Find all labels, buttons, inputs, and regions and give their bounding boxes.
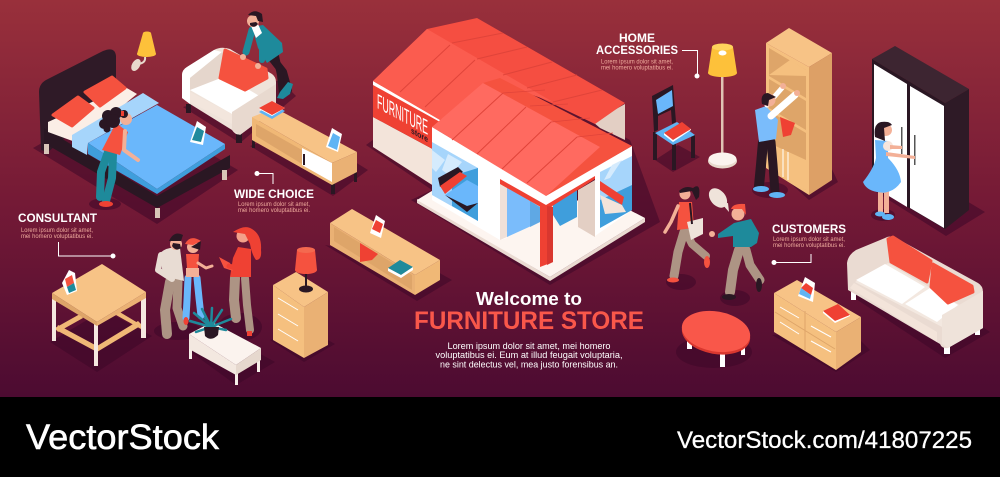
label: customers: Lorem ipsum dolor sit amet,: [773, 237, 845, 243]
label: home accessories: ACCESSORIES: [596, 45, 678, 57]
main title: [414, 288, 644, 370]
bed: [33, 49, 238, 224]
icon: speech bubble: [705, 185, 731, 212]
label: customers: mei homero voluptatibus ei.: [773, 243, 845, 249]
open shelf unit: [325, 209, 452, 301]
wardrobe: [865, 46, 985, 236]
blue chair: [652, 85, 700, 172]
sign: furniture store: [373, 81, 440, 153]
furniture store building: [366, 18, 660, 285]
person: girl at wardrobe: [863, 122, 915, 221]
main title: ne sint delectus vel, mea justo forensibus an.: [440, 360, 618, 370]
dresser: [772, 277, 870, 372]
back block walls: [373, 117, 440, 190]
armchair: [182, 48, 296, 143]
front roof: [432, 78, 632, 196]
icon: red table lamp: [295, 247, 317, 292]
sofa: [847, 236, 990, 358]
oval red table: [676, 306, 753, 368]
label: consultant: Lorem ipsum dolor sit amet,: [21, 228, 93, 234]
footer bar: VectorStock: [26, 418, 220, 457]
floor lamp: [708, 44, 737, 168]
label: home accessories: Lorem ipsum dolor sit amet,: [601, 60, 673, 66]
main title: voluptatibus ei. Eum at illud feugait voluptaria,: [436, 350, 622, 361]
main title: Welcome to: [476, 288, 582, 309]
people: couple and consultant: [154, 227, 262, 341]
man: [158, 233, 184, 334]
woman: [184, 238, 212, 325]
main title: Lorem ipsum dolor sit amet, mei homero: [448, 341, 610, 352]
platform: [417, 199, 645, 281]
label: home accessories: HOME: [619, 33, 655, 45]
sign: [326, 128, 342, 152]
label: customers: [772, 224, 846, 265]
person: man at bookcase: [752, 83, 800, 198]
footer bar: VectorStock.com/41807225: [677, 427, 972, 454]
consultant: [219, 227, 261, 336]
fascia and red column: [500, 176, 595, 267]
label: wide choice: mei homero voluptatibus ei.: [238, 208, 310, 214]
label: wide choice: WIDE CHOICE: [234, 189, 314, 201]
label: wide choice: Lorem ipsum dolor sit amet,: [238, 202, 310, 208]
label: home accessories: [596, 33, 700, 78]
nightstand with red lamp: [270, 247, 335, 362]
person: man with pillow: [240, 11, 293, 99]
label: customers: CUSTOMERS: [772, 224, 846, 236]
label: consultant: CONSULTANT: [18, 213, 97, 225]
coffee table with plant: [188, 308, 275, 385]
right window: [600, 156, 632, 228]
front walls: [432, 127, 632, 240]
label: consultant: mei homero voluptatibus ei.: [21, 234, 93, 240]
person: walking woman with bag: [665, 186, 710, 290]
main title: FURNITURE STORE: [414, 307, 644, 335]
bookcase: [766, 28, 838, 200]
icon: wall lamp: [129, 32, 156, 73]
sign: [798, 277, 815, 302]
label: home accessories: mei homero voluptatibus ei.: [601, 66, 673, 72]
person: walking man: [709, 204, 762, 306]
wooden table: [50, 264, 152, 372]
label: wide choice: [234, 171, 314, 214]
sign: furniture store: store: [411, 126, 428, 144]
label: consultant: [18, 213, 116, 258]
person: woman at bed: [89, 107, 138, 210]
back roof: [373, 18, 625, 124]
sign: furniture store: FURNITURE: [377, 89, 428, 140]
sign: [62, 270, 77, 295]
left window with bed: [432, 142, 478, 221]
sign: [370, 215, 385, 238]
sideboard with sign and books: [250, 101, 368, 196]
icon: plant: [190, 308, 231, 339]
doorway: [500, 180, 595, 240]
sign on bed: [190, 121, 206, 145]
footer bar: [0, 397, 1000, 477]
